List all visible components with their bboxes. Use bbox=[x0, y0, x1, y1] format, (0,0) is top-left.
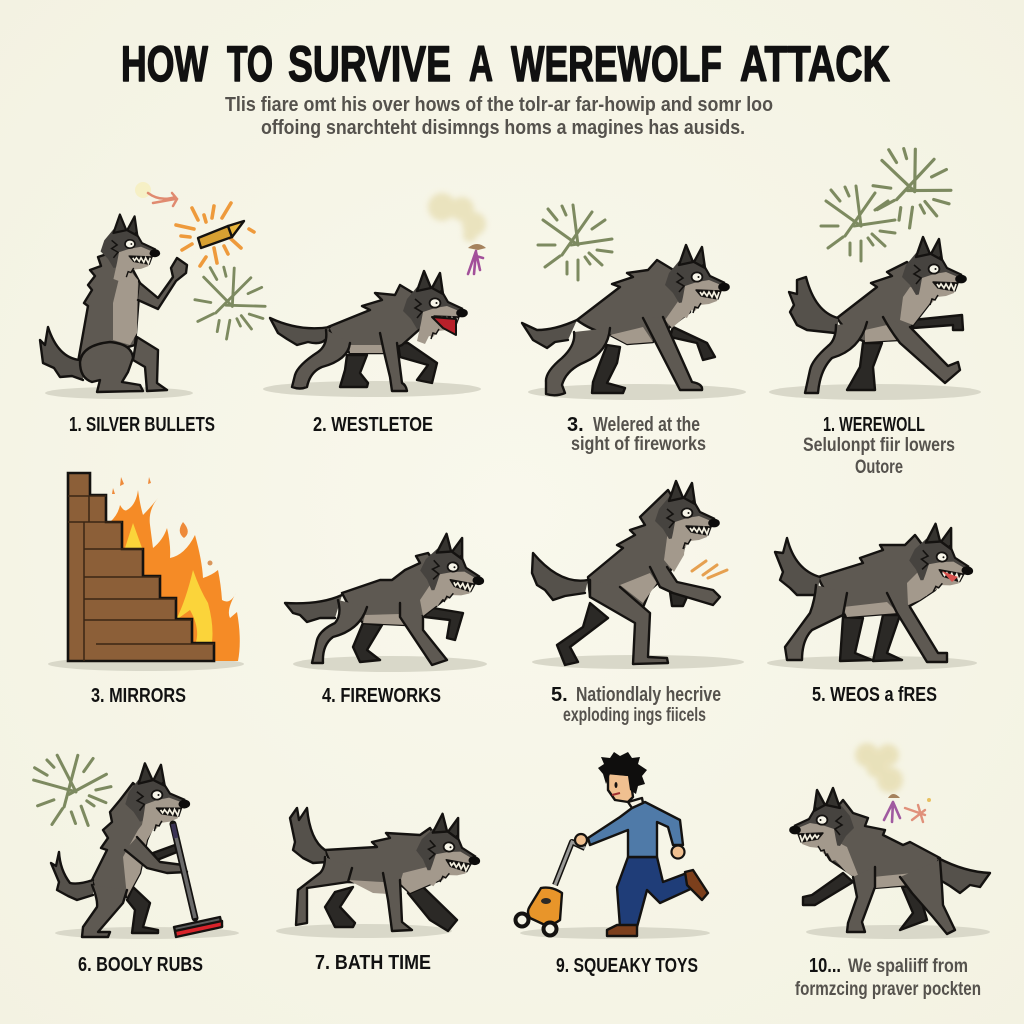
wolf 12 bbox=[789, 788, 990, 934]
label 7: Nationdlaly hecrive bbox=[576, 684, 721, 706]
ground shadow 1 bbox=[45, 387, 193, 399]
panel: 11 squeaky toys bbox=[516, 752, 710, 977]
ground shadow 3 bbox=[528, 384, 746, 400]
icon: green firework bbox=[189, 262, 271, 345]
icon: orange burst bbox=[176, 203, 254, 266]
ground shadow 12 bbox=[806, 925, 990, 939]
label 3: sight of fireworks bbox=[571, 434, 706, 455]
ground shadow 11 bbox=[520, 927, 710, 939]
label 10: 7. BATH TIME bbox=[315, 952, 431, 974]
panel: 4 werewoll bbox=[769, 144, 981, 478]
panel: 12 spaliiff bbox=[789, 743, 990, 1000]
icon: green firework bbox=[24, 742, 121, 839]
title bbox=[121, 36, 890, 92]
label 7: exploding ings fiicels bbox=[563, 705, 706, 726]
person with vacuum bbox=[516, 752, 708, 936]
title: ATTACK bbox=[740, 36, 890, 92]
title: A bbox=[469, 36, 493, 92]
panel: 2 westletoe bbox=[263, 193, 486, 436]
panel: 1 silver bullets bbox=[40, 182, 271, 436]
ground shadow 2 bbox=[263, 381, 481, 397]
label 7: 5. bbox=[551, 684, 568, 706]
open red mouth bbox=[432, 317, 456, 335]
icon: wooden staircase bbox=[68, 473, 214, 661]
label 12: We spaliiff from bbox=[848, 956, 968, 977]
wolf 7 bbox=[532, 481, 720, 665]
icon: smoke and rocket bbox=[855, 743, 931, 822]
label 7 bbox=[551, 684, 721, 726]
red mouth tint bbox=[942, 571, 958, 582]
subtitle bbox=[225, 94, 773, 139]
icon: green firework bbox=[538, 205, 612, 280]
title: HOW bbox=[121, 36, 209, 92]
label 12: formzcing praver pockten bbox=[795, 979, 981, 1000]
ground shadow 7 bbox=[532, 655, 744, 669]
title: SURVIVE bbox=[288, 36, 451, 92]
panel: 7 nationally bbox=[532, 481, 744, 726]
panel: 3 fireworks sight bbox=[522, 205, 746, 455]
label 6: 4. FIREWORKS bbox=[322, 685, 441, 707]
label 2: 2. WESTLETOE bbox=[313, 414, 433, 436]
label 3: Welered at the bbox=[593, 414, 700, 436]
vacuum cleaner bbox=[516, 842, 585, 936]
ground shadow 4 bbox=[769, 384, 981, 400]
panel: 5 burning stairs bbox=[48, 473, 244, 707]
label 9: 6. BOOLY RUBS bbox=[78, 954, 203, 976]
label 4: Selulonpt fiir lowers bbox=[803, 435, 955, 456]
subtitle: offoing snarchteht disimngs homs a magines has ausids. bbox=[261, 117, 745, 139]
label 4: 1. WEREWOLL bbox=[823, 414, 925, 436]
icon: orange sparks bbox=[692, 561, 727, 578]
broom bbox=[173, 824, 222, 937]
label 3: 3. bbox=[567, 414, 584, 436]
ground shadow 10 bbox=[276, 924, 452, 938]
title: TO bbox=[227, 36, 273, 92]
label 8: 5. WEOS a fRES bbox=[812, 684, 937, 706]
wolf 3 bbox=[522, 245, 730, 395]
panel: 9 booly rubs bbox=[24, 742, 239, 976]
label 3 bbox=[567, 414, 706, 455]
wolf 2 bbox=[270, 271, 468, 391]
ground shadow 6 bbox=[293, 656, 487, 672]
ground shadow 9 bbox=[55, 927, 239, 939]
panel: 6 fireworks bbox=[285, 531, 490, 707]
label 1: 1. SILVER BULLETS bbox=[69, 414, 215, 436]
icon: double firework bbox=[821, 144, 956, 261]
wolf 6 bbox=[285, 531, 490, 665]
label 11: 9. SQUEAKY TOYS bbox=[556, 955, 698, 977]
wolf 4 bbox=[789, 237, 967, 393]
wolf 10 bbox=[290, 808, 486, 931]
wolf 1 bbox=[40, 215, 187, 392]
label 12: 10... bbox=[809, 955, 841, 977]
panel: 10 bath time bbox=[276, 808, 486, 974]
ground shadow 5 bbox=[48, 657, 244, 671]
icon: smoke and rocket bbox=[428, 193, 486, 274]
icon: small rocket bbox=[135, 182, 177, 206]
label 5: 3. MIRRORS bbox=[91, 685, 186, 707]
icon: flames bbox=[100, 477, 240, 661]
label 12 bbox=[795, 955, 981, 1000]
panel: 8 weos a fres bbox=[767, 521, 979, 706]
wolf 8 bbox=[775, 521, 979, 662]
wolf 9 with broom bbox=[51, 762, 222, 937]
icon: silver bullet bbox=[198, 221, 244, 248]
ground shadow 8 bbox=[767, 656, 977, 670]
title: WEREWOLF bbox=[511, 36, 722, 92]
label 4 bbox=[803, 414, 955, 478]
label 4: Outore bbox=[855, 457, 903, 478]
subtitle: Tlis fiare omt his over hows of the tolr-ar far-howip and somr loo bbox=[225, 94, 773, 116]
